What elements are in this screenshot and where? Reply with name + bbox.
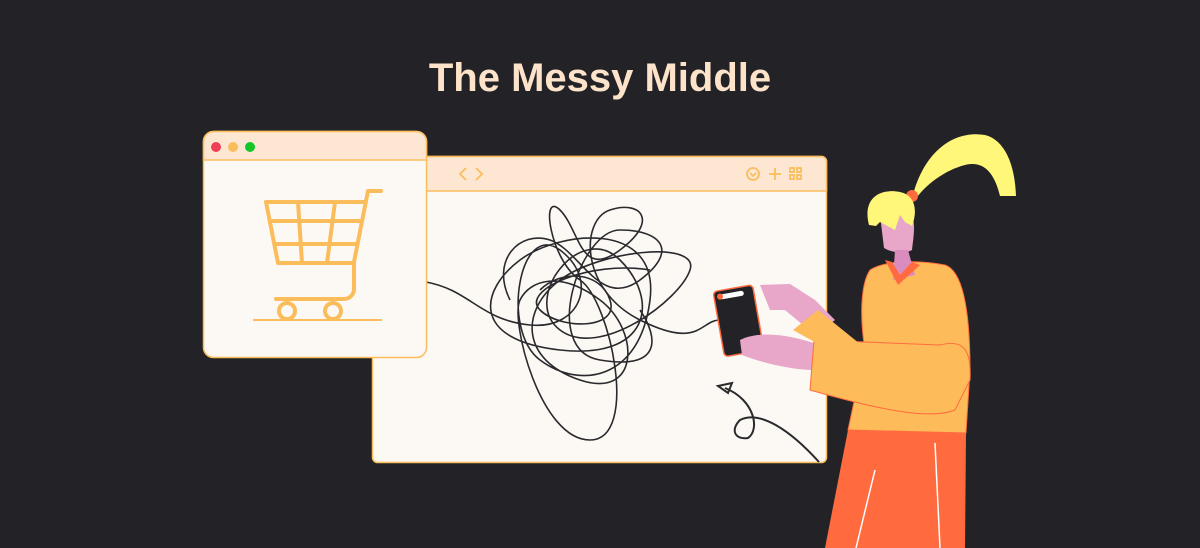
torso xyxy=(848,262,970,433)
sleeve xyxy=(810,340,970,414)
icon: shopping cart xyxy=(266,191,381,319)
head xyxy=(880,215,914,252)
ponytail xyxy=(913,134,1016,200)
arrow: curly xyxy=(718,383,819,462)
skirt xyxy=(825,430,966,548)
figure: woman with phone xyxy=(713,134,1016,548)
scribble xyxy=(426,206,720,440)
icon: toolbar icons xyxy=(747,168,801,180)
hands and phone xyxy=(760,284,835,335)
panel: big browser window xyxy=(372,156,826,462)
panel: cart window xyxy=(204,132,426,358)
icon: nav arrows xyxy=(460,168,482,180)
title: The Messy Middle xyxy=(429,56,771,100)
